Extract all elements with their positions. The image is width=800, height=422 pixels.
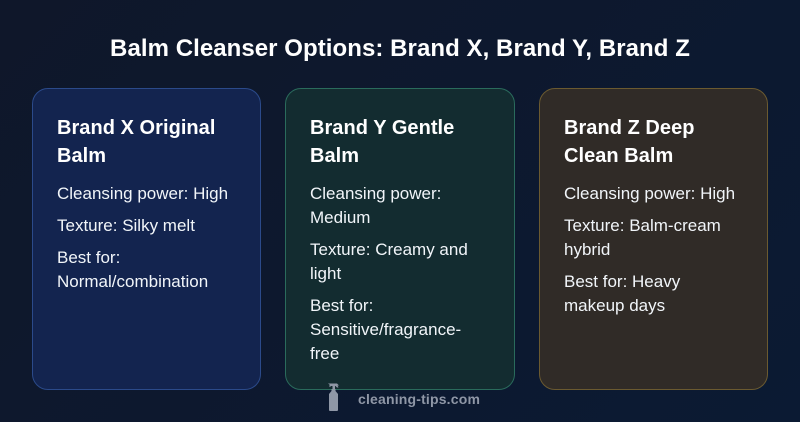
footer: site name: cleaning-tips.com: [358, 391, 480, 407]
heading: Brand Y Gentle Balm: Brand Y Gentle: [310, 117, 454, 139]
text: texture: hybrid: [564, 240, 610, 259]
text: best for: [57, 248, 208, 291]
text: best for: Normal/combination: [57, 272, 208, 291]
text: cleansing power: Medium: [310, 208, 370, 227]
text: texture: [564, 216, 721, 259]
text: texture: Texture: Creamy and: [310, 240, 468, 259]
text: cleansing power: Cleansing power: High: [57, 184, 228, 203]
text: best for: Best for:: [57, 248, 120, 267]
panel: Brand Z: [539, 88, 768, 390]
text: best for: free: [310, 344, 339, 363]
text: best for: Best for:: [310, 296, 373, 315]
text: texture: light: [310, 264, 341, 283]
icon: spray bottle: [328, 384, 339, 411]
text: texture: [310, 240, 468, 283]
panel: Brand X: [32, 88, 261, 390]
text: cleansing power: Cleansing power: High: [564, 184, 735, 203]
text: cleansing power: [310, 184, 441, 227]
heading: Brand X Original Balm: [57, 117, 215, 167]
heading: Brand Y Gentle Balm: Balm: [310, 145, 359, 167]
text: best for: [564, 272, 680, 315]
text: best for: makeup days: [564, 296, 665, 315]
heading: Brand Y Gentle Balm: [310, 117, 454, 167]
heading: Brand Z Deep Clean Balm: Clean Balm: [564, 145, 673, 167]
heading: Brand Z Deep Clean Balm: [564, 117, 694, 167]
text: cleansing power: Cleansing power:: [310, 184, 441, 203]
heading: Brand X Original Balm: Brand X Original: [57, 117, 215, 139]
title: Balm Cleanser Options: Brand X, Brand Y, Brand Z: [110, 35, 690, 62]
heading: Brand Z Deep Clean Balm: Brand Z Deep: [564, 117, 694, 139]
heading: Brand X Original Balm: Balm: [57, 145, 106, 167]
panel: Brand Y: [285, 88, 515, 390]
text: best for: [310, 296, 461, 363]
text: best for: Best for: Heavy: [564, 272, 680, 291]
text: best for: Sensitive/fragrance-: [310, 320, 461, 339]
text: texture: Texture: Balm-cream: [564, 216, 721, 235]
text: texture: Texture: Silky melt: [57, 216, 195, 235]
